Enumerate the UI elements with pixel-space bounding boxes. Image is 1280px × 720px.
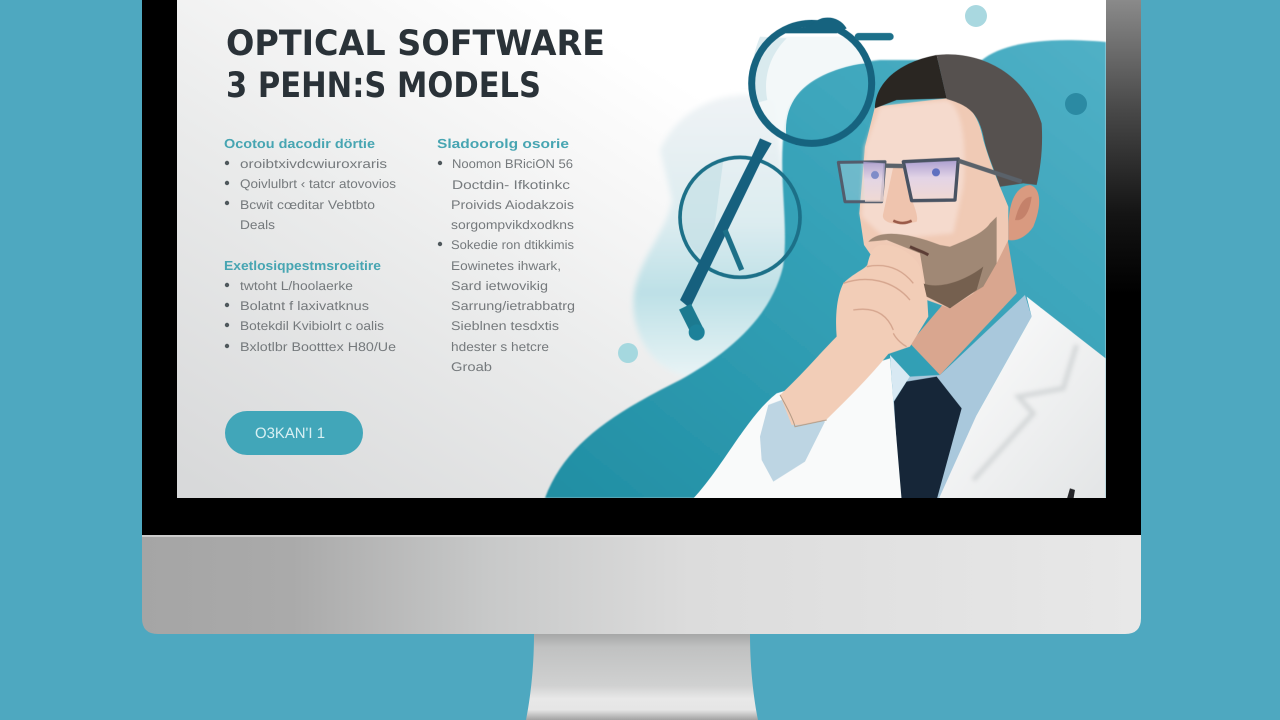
infographic canvas — [142, 0, 1141, 720]
text column: left: Bcwit cœditar Vebtbto — [240, 198, 375, 212]
person — [692, 54, 1106, 500]
monitor stand — [526, 634, 758, 720]
text column: left — [224, 136, 396, 354]
title — [228, 29, 602, 98]
text column: left: twtoht L/hoolaerke — [240, 279, 353, 293]
text column: left: Ocotou dacodir dörtie — [224, 136, 375, 151]
text column: right: sorgompvikdxodkns — [451, 218, 574, 232]
tie — [894, 377, 962, 500]
hand — [780, 245, 928, 425]
text column: left: oroibtxivdcwiuroxraris — [240, 157, 387, 171]
lab coat right — [938, 297, 1106, 500]
text column: right: Sarrung/ietrabbatrg — [451, 299, 575, 313]
text column: right: Groab — [451, 360, 492, 374]
text column: right: Sladoorolg osorie — [437, 136, 569, 151]
nose — [883, 167, 917, 224]
ear — [1008, 185, 1039, 240]
neck — [910, 233, 1017, 375]
text column: right: Proivids Aiodakzois — [451, 198, 574, 212]
monitor body — [142, 0, 1141, 634]
text column: left: Bxlotlbr Bootttex H80/Ue — [240, 340, 396, 354]
text column: left: Bolatnt f laxivatknus — [240, 299, 369, 313]
floating dots — [602, 4, 1087, 363]
blue shirt — [890, 295, 1032, 500]
beard and moustache — [868, 216, 997, 296]
text column: right — [437, 136, 575, 374]
shirt cuff — [760, 400, 825, 482]
text column: left: Qoivlulbrt ‹ tatcr atovovios — [240, 177, 396, 191]
text column: right: Eowinetes ihwark, — [451, 259, 561, 273]
call-to-action button — [225, 411, 363, 455]
text column: left: Deals — [240, 218, 275, 232]
hair — [875, 55, 947, 108]
text column: left: Exetlosiqpestmsroeitire — [224, 258, 381, 273]
face — [859, 98, 1008, 308]
teal background blob — [545, 40, 1106, 498]
title: 3 PEHN:S MODELS — [226, 66, 541, 106]
text column: right: hdester s hetcre — [451, 340, 549, 354]
text column: right: Sokedie ron dtikkimis — [451, 238, 574, 252]
title: OPTICAL SOFTWARE — [226, 24, 605, 64]
text column: left: Botekdil Kvibiolrt c oalis — [240, 319, 384, 333]
lab coat left — [692, 358, 902, 500]
decorative pale blob — [633, 95, 800, 378]
spectacles on face — [838, 162, 885, 202]
text column: right: Sard ietwovikig — [451, 279, 548, 293]
call-to-action button: O3KAN'I 1 — [255, 425, 325, 442]
eyeglasses illustration — [680, 17, 890, 340]
text column: right: Noomon BRiciON 56 — [452, 157, 573, 171]
text column: right: Sieblnen tesdxtis — [451, 319, 559, 333]
text column: right: Doctdin- Ifkotinkc — [452, 178, 570, 192]
screen slide — [177, 0, 1106, 500]
